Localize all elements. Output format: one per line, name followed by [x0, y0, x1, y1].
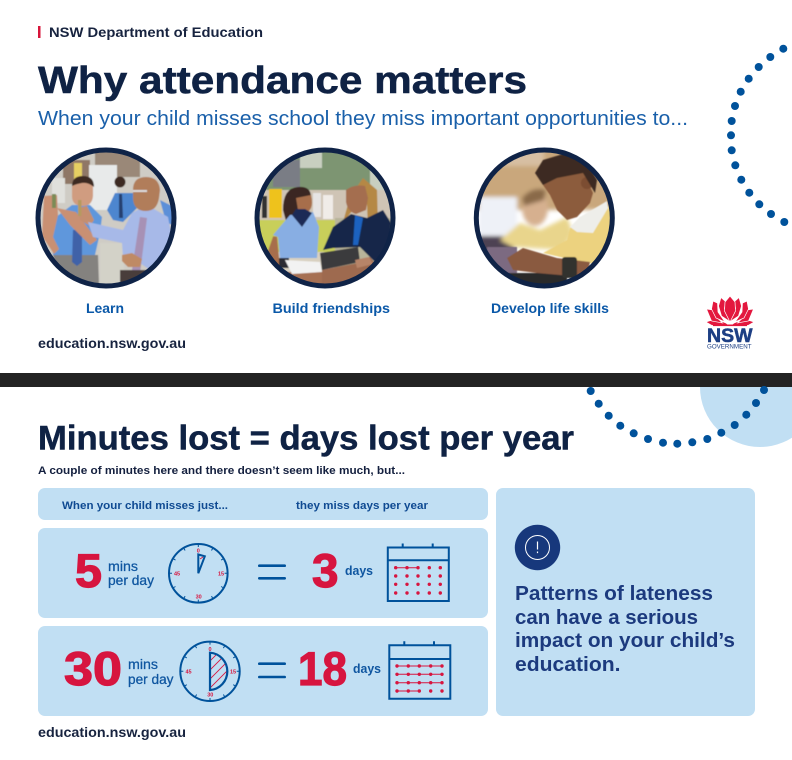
number: 5: 5	[75, 544, 102, 597]
unit: mins per day: mins	[108, 559, 138, 574]
girl right	[344, 178, 378, 220]
decorative dotted arc: top	[727, 45, 788, 226]
label: Build friendships: Build friendships	[272, 301, 390, 316]
boy	[52, 205, 102, 255]
icon: clock 30 minutes: 45	[185, 669, 192, 675]
icon: clock 30 minutes: 15	[230, 669, 236, 675]
number: 18: 18	[298, 642, 347, 695]
number: 3: 3	[312, 544, 338, 597]
header: department label: NSW Department of Education	[49, 25, 263, 40]
panel: 5 mins row	[38, 528, 488, 618]
number: 30: 30	[64, 642, 122, 695]
equals sign	[259, 664, 285, 677]
website link: bottom: education.nsw.gov.au	[38, 724, 186, 740]
logo: NSW Government	[706, 296, 754, 350]
icon: clock 30 minutes: 0	[208, 647, 212, 653]
callout text: can have a serious	[515, 607, 698, 629]
wordmark: Government: GOVERNMENT	[707, 344, 752, 350]
icon: calendar 3 days	[388, 544, 449, 601]
icon: clock 30 minutes	[180, 642, 240, 702]
icon: clock 5 minutes: 15	[218, 571, 224, 577]
column heading: days: they miss days per year	[296, 500, 429, 512]
background student	[114, 176, 126, 188]
label: Learn: Learn	[86, 301, 124, 316]
icon: clock 5 minutes: 30	[196, 594, 202, 600]
icon: clock 5 minutes: 45	[174, 571, 180, 577]
panel: lateness callout	[496, 488, 755, 716]
divider band	[0, 373, 792, 387]
unit: mins per day	[128, 657, 174, 687]
icon: waratah flower	[706, 296, 754, 326]
man	[88, 208, 170, 268]
icon: clock 5 minutes	[169, 544, 228, 603]
panel: 30 mins row	[38, 626, 488, 716]
unit: mins per day: per day	[108, 573, 154, 588]
label: Develop life skills: Develop life skills	[491, 301, 609, 316]
callout text: education.	[515, 654, 620, 676]
callout text: Patterns of lateness	[515, 583, 713, 605]
title: Why attendance matters	[38, 60, 527, 102]
icon: calendar 18 days	[389, 641, 450, 699]
girl left	[283, 187, 311, 221]
heading: minutes lost: Minutes lost = days lost per year	[38, 420, 574, 458]
icon: clock 30 minutes: 30	[207, 692, 213, 698]
callout text: impact on your child’s	[515, 630, 735, 652]
equals sign	[259, 566, 285, 578]
wordmark: NSW: NSW	[707, 326, 753, 347]
panel: table header	[38, 488, 488, 520]
subtitle: When your child misses school they miss important opportunities to...	[38, 108, 688, 130]
icon: exclamation	[515, 525, 560, 570]
photo: Build friendships	[255, 148, 395, 288]
icon: clock 5 minutes: 0	[197, 548, 200, 554]
unit: days: days	[353, 661, 381, 676]
callout text	[515, 583, 735, 676]
website link: top: education.nsw.gov.au	[38, 335, 186, 351]
column heading: misses: When your child misses just...	[62, 500, 228, 512]
photo: Develop life skills	[474, 148, 614, 288]
decorative light blue circle	[700, 387, 792, 447]
unit: mins per day: mins	[128, 657, 158, 672]
unit: days: days	[345, 563, 373, 578]
intro text: A couple of minutes here and there doesn’t seem like much, but...	[38, 465, 405, 477]
unit: mins per day	[108, 559, 154, 588]
unit: mins per day: per day	[128, 672, 174, 687]
photo: Learn	[36, 148, 176, 288]
decorative dotted arc: bottom	[587, 386, 768, 448]
